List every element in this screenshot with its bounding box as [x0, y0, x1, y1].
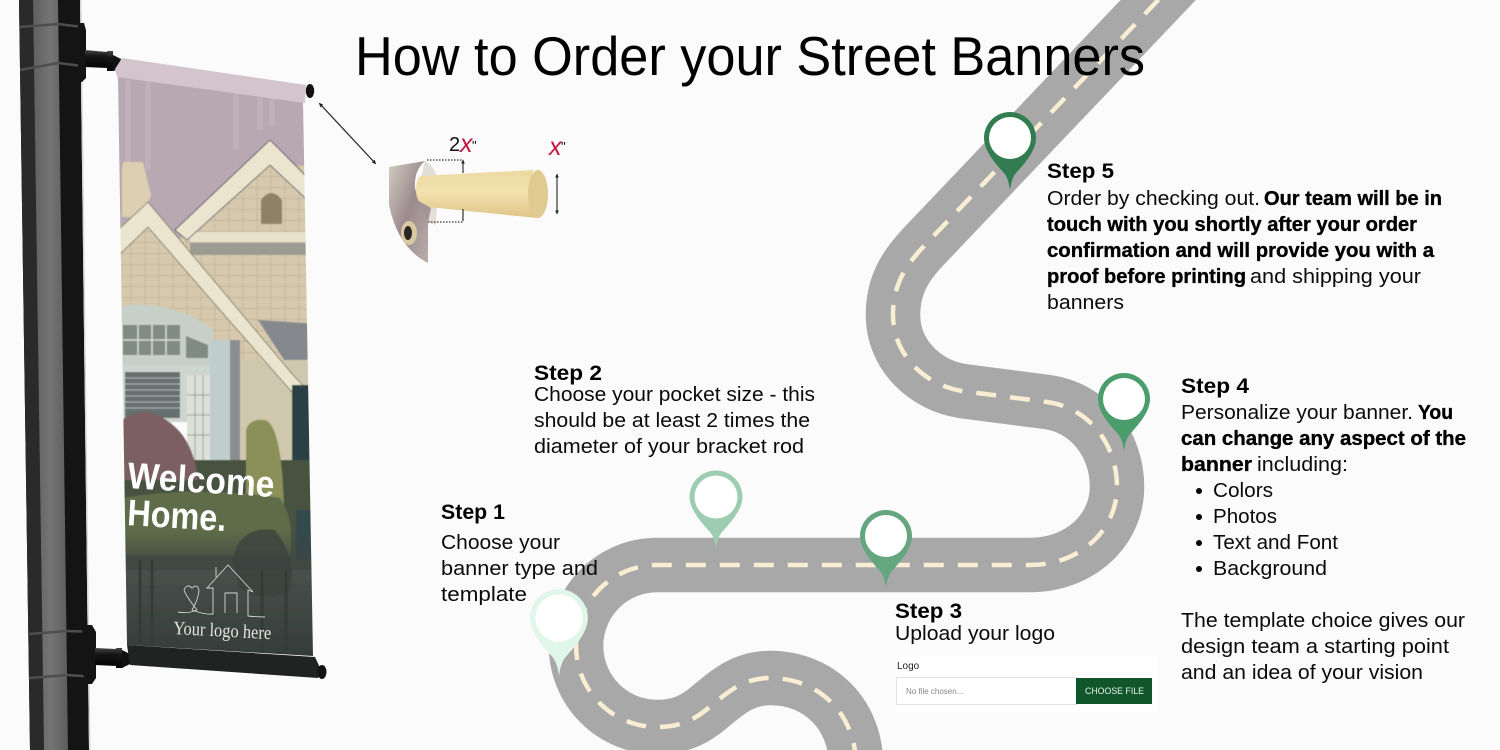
house walls: [176, 165, 307, 360]
upper bracket: [78, 23, 121, 82]
arched window: [122, 304, 214, 366]
step 4 text: Personalize your banner.: [1181, 402, 1413, 424]
logo upload field: Logo: [897, 661, 920, 672]
banner headline: Welcome: [127, 455, 276, 505]
wooden rod: [416, 170, 537, 218]
grommet: [401, 221, 417, 245]
bullet list: [1196, 480, 1338, 580]
door: [291, 384, 310, 461]
road: [576, 0, 1182, 750]
label 2x: [449, 130, 477, 158]
step 1 text: Choose your: [441, 532, 560, 554]
bullet list: Background: [1213, 558, 1327, 580]
bullet list: Text and Font: [1213, 532, 1338, 554]
pin: step 5: [984, 112, 1036, 190]
top rod end: [306, 84, 314, 98]
red tree: [122, 412, 198, 480]
step 5 text: and shipping your: [1250, 266, 1421, 288]
pin: step 2: [690, 470, 742, 549]
step 2 text: Step 2: [534, 361, 602, 385]
right gable trim: [175, 140, 320, 240]
bullet list: Photos: [1213, 506, 1277, 528]
dark shrub: [296, 510, 311, 553]
logo upload field: CHOOSE FILE: [1085, 686, 1144, 697]
step 4 text: The template choice gives our: [1181, 610, 1465, 632]
lower bracket: [82, 625, 130, 684]
title: How to Order your Street Banners: [355, 25, 1145, 87]
logo upload field: No file chosen...: [906, 687, 963, 696]
step 2 text: should be at least 2 times the: [534, 410, 810, 432]
pocket dimension lines: [427, 160, 463, 222]
step 4 text: can change any aspect of the: [1181, 428, 1466, 450]
step 3 text: [895, 599, 1055, 645]
label x: x: [548, 133, 563, 161]
bottom rod end: [318, 665, 326, 679]
chimney: [122, 162, 151, 217]
sky: [118, 77, 304, 240]
diagram arrow to rod detail: [320, 104, 375, 163]
garden base: [118, 460, 318, 570]
step 5 text: proof before printing: [1047, 266, 1246, 288]
bottom pocket: [127, 645, 322, 678]
label x: [548, 133, 566, 161]
step 5 text: confirmation and will provide you with a: [1047, 240, 1435, 262]
pin: step 3: [860, 510, 912, 588]
dark fade: [126, 538, 313, 656]
hedge: [122, 492, 291, 555]
step 5 text: [1047, 159, 1442, 314]
label 2x: 2: [449, 134, 460, 156]
step 4 text: [1181, 374, 1466, 684]
top pocket: [115, 58, 306, 103]
step 1 text: banner type and: [441, 558, 598, 580]
step 1 text: [441, 500, 598, 606]
pocket flap: [389, 161, 428, 263]
label 2x: x: [459, 130, 474, 158]
banner on pole photo: [19, 0, 326, 750]
choose file button: [1076, 678, 1152, 704]
rod dimension arrow: [556, 175, 558, 213]
step 3 text: Step 3: [895, 599, 962, 623]
logo upload field: [895, 656, 1158, 712]
pocket fold: [417, 200, 431, 222]
pole: [19, 0, 95, 750]
step 4 text: banner: [1181, 454, 1252, 476]
step 2 text: [534, 361, 815, 458]
step 4 text: including:: [1257, 454, 1348, 476]
step 5 text: Our team will be in: [1264, 188, 1442, 210]
pin: step 4: [1098, 373, 1150, 451]
pocket back: [418, 161, 438, 225]
topiary: [246, 420, 284, 510]
label 2x: ": [472, 138, 477, 153]
left house wall: [120, 228, 168, 289]
step 4 text: design team a starting point: [1181, 636, 1449, 658]
banner logo icon: house and heart: [178, 565, 265, 617]
attic vent: [261, 193, 282, 224]
step 4 text: You: [1418, 402, 1453, 424]
rod and pocket detail: [389, 130, 566, 263]
banner headline: Home.: [126, 492, 228, 539]
banner headline: [124, 455, 276, 542]
shaded bush: [232, 529, 292, 598]
step 2 text: diameter of your bracket rod: [534, 436, 804, 458]
step 5 text: banners: [1047, 292, 1124, 314]
step 1 text: Step 1: [441, 500, 505, 524]
pin: step 1: [530, 589, 588, 676]
roof slate: [258, 320, 308, 360]
step 5 text: Step 5: [1047, 159, 1114, 183]
step 2 text: Choose your pocket size - this: [534, 384, 815, 406]
banner print: [110, 70, 322, 660]
step 5 text: touch with you shortly after your order: [1047, 214, 1417, 236]
step 1 text: template: [441, 584, 527, 606]
rod end: [528, 170, 548, 218]
step 4 text: and an idea of your vision: [1181, 662, 1423, 684]
banner logo text: Your logo here: [173, 618, 272, 644]
step 5 text: Order by checking out.: [1047, 188, 1260, 210]
label x: ": [561, 139, 566, 154]
step 4 text: Step 4: [1181, 374, 1249, 398]
bullet list: Colors: [1213, 480, 1273, 502]
step 3 text: Upload your logo: [895, 623, 1055, 645]
left gable trim: [120, 201, 304, 393]
